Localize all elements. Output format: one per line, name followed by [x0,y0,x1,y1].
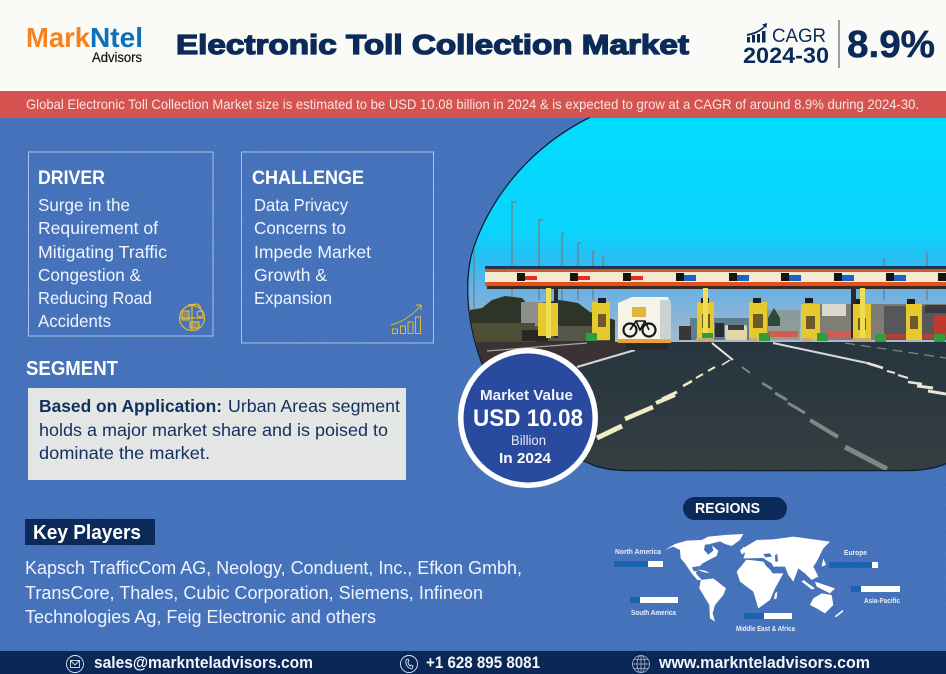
callout: market value: Billion [511,433,546,448]
icon: phone [400,656,418,672]
driver text: Reducing Road [38,288,152,308]
lamp posts [474,202,927,340]
driver text: Congestion & [38,265,141,285]
CAGR value: 8.9% [847,24,935,66]
driver text: Accidents [38,311,111,331]
key players list [25,557,522,627]
panel: segment [28,388,406,480]
segment text: dominate the market. [39,443,210,463]
bar: Asia-Pacific: Asia-Pacific [864,596,900,605]
world map [665,534,843,622]
bar: South America [630,597,678,617]
driver text [38,195,167,331]
road markings [487,343,946,469]
treeline and roadside [470,296,615,342]
divider [838,20,840,68]
website: www.marknteladvisors.com [658,653,870,672]
challenge heading: CHALLENGE [252,167,364,189]
logo: MarkNtel Advisors [26,22,143,65]
driver text: Mitigating Traffic [38,242,167,262]
road [460,342,946,475]
CAGR label: CAGR [772,26,826,47]
panel: challenge [242,152,434,343]
driver text: Requirement of [38,218,158,238]
bar: North America: North America [615,547,662,556]
driver text: Surge in the [38,195,130,215]
phone: +1 628 895 8081 [426,653,540,672]
callout: market value: Market Value [480,387,573,404]
logo: MarkNtel Advisors: Mark [26,22,90,53]
challenge text: Growth & [254,265,327,285]
bar: Europe: Europe [844,548,867,557]
callout: market value: USD 10.08 [473,405,583,432]
title: Electronic Toll Collection Market [176,29,689,60]
panel: driver [28,152,213,336]
CAGR label [743,26,829,68]
panel: regions [614,497,900,633]
callout: market value [458,348,598,488]
bar: Middle East and Africa: Middle East & Africa [736,624,796,633]
icon: growth chart [391,305,421,334]
key players heading: Key Players [33,522,141,544]
driver heading: DRIVER [38,168,105,189]
regions heading [683,497,787,520]
icon: email [66,656,84,672]
challenge text: Expansion [254,288,332,308]
key players list: Kapsch TrafficCom AG, Neology, Conduent, Inc., Efkon Gmbh, [25,557,522,578]
challenge text [254,195,371,308]
barriers [768,331,798,337]
icon: globe [632,656,650,672]
bar: Middle East and Africa [736,613,796,633]
icon: traffic globe [180,304,204,330]
header band [0,0,946,91]
summary band [0,91,946,118]
bar: Asia-Pacific [851,586,900,605]
bar: Europe [829,548,878,568]
logo: MarkNtel Advisors: Ntel [90,22,143,53]
challenge text: Impede Market [254,242,371,262]
motorhome with bicycle [618,297,671,350]
gantry [485,266,946,289]
cars [679,323,747,340]
bar: North America [614,547,663,567]
CAGR label: 2024-30 [743,43,829,68]
regions heading: REGIONS [695,501,760,517]
toll booths and pillars [538,288,945,342]
segment text: Urban Areas segment [228,396,400,416]
panel: key players [25,519,522,627]
bar: South America: South America [631,608,677,617]
challenge text: Concerns to [254,218,346,238]
challenge text: Data Privacy [254,195,348,215]
photo: toll plaza [460,118,946,475]
footer band [0,651,946,674]
segment text: holds a major market share and is poised to [39,420,388,440]
logo: MarkNtel Advisors: Advisors [92,49,142,65]
icon: growth bars [747,23,767,42]
segment text: Based on Application: [39,396,222,416]
key players list: Technologies Ag, Feig Electronic and others [25,606,376,627]
segment text [39,396,400,463]
segment heading: SEGMENT [26,358,118,380]
key players list: TransCore, Thales, Cubic Corporation, Siemens, Infineon [25,582,483,603]
callout: market value: In 2024 [499,450,552,467]
email: sales@marknteladvisors.com [94,653,313,672]
